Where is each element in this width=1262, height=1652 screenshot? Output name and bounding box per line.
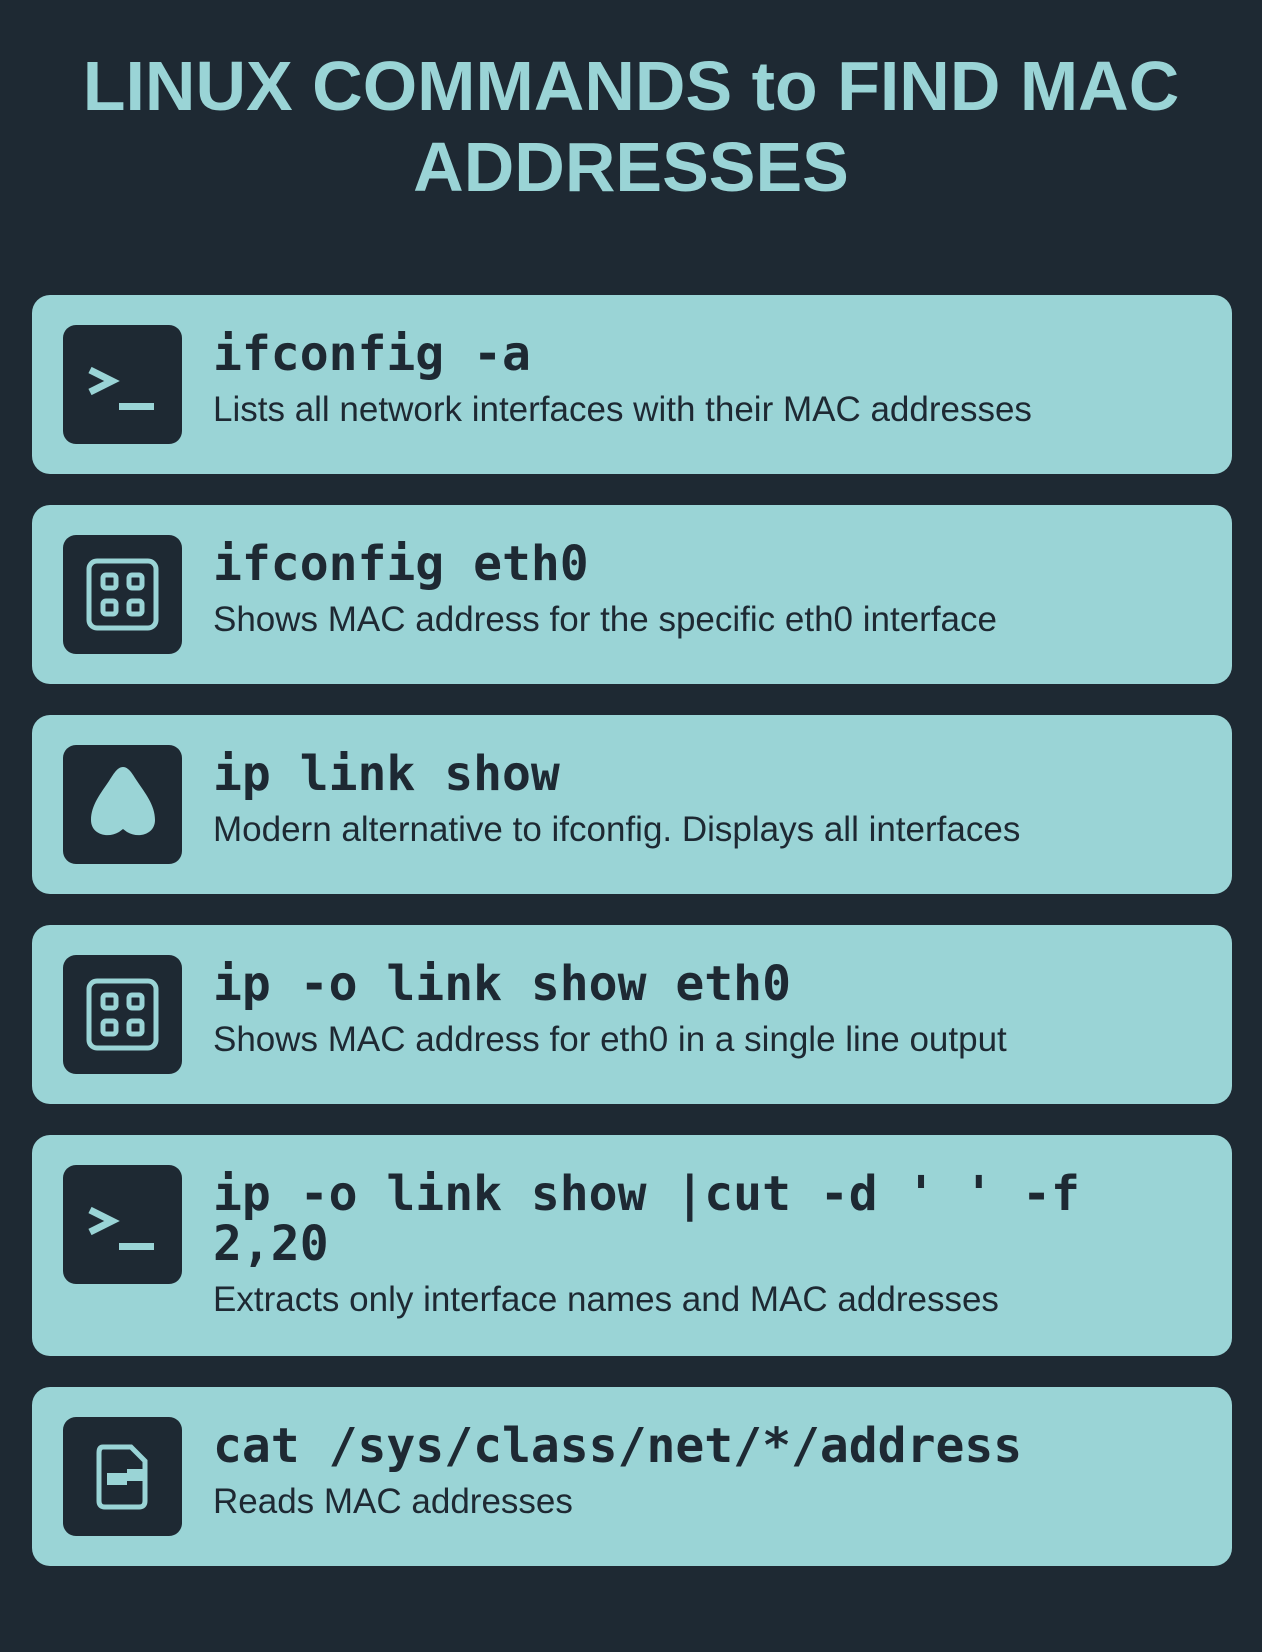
text: cut command: Extracts only interface names and MAC addresses: [213, 1280, 999, 1319]
text: cut command: [213, 1166, 1080, 1319]
icon: network card: [63, 955, 182, 1074]
text: ip -o link show eth0: ip -o link show eth0: [213, 956, 791, 1012]
text: ip link show: ip link show: [213, 746, 560, 802]
card: cat address: [32, 1387, 1232, 1566]
icon: terminal: [63, 325, 182, 444]
icon: network card: [63, 535, 182, 654]
title: LINUX COMMANDS to FIND MAC: [83, 47, 1179, 125]
title: ADDRESSES: [413, 128, 849, 206]
text: ifconfig eth0: ifconfig eth0: [213, 536, 589, 592]
card: ifconfig eth0: [32, 505, 1232, 684]
text: cut command: ip -o link show |cut -d ' ' -f: [213, 1166, 1080, 1222]
text: cat address: Reads MAC addresses: [213, 1482, 573, 1521]
icon: file: [63, 1417, 182, 1536]
text: ip -o link show eth0: Shows MAC address for eth0 in a single line output: [213, 1020, 1007, 1059]
text: cat address: cat /sys/class/net/*/address: [213, 1418, 1022, 1474]
text: cat address: [213, 1418, 1022, 1521]
text: ifconfig -a: ifconfig -a: [213, 326, 531, 382]
icon: link drop: [63, 745, 182, 864]
card: ip link show: [32, 715, 1232, 894]
text: ip link show: [213, 746, 1020, 849]
text: ip link show: Modern alternative to ifconfig. Displays all interfaces: [213, 810, 1020, 849]
text: ip -o link show eth0: [213, 956, 1007, 1059]
title: [83, 47, 1179, 206]
card: ip -o link show cut: [32, 1135, 1232, 1356]
text: cut command: 2,20: [213, 1216, 329, 1272]
card: ip -o link show eth0: [32, 925, 1232, 1104]
text: ifconfig -a: [213, 326, 1032, 429]
card: ifconfig -a: [32, 295, 1232, 474]
text: ifconfig eth0: Shows MAC address for the specific eth0 interface: [213, 600, 997, 639]
text: ifconfig -a: Lists all network interfaces with their MAC addresses: [213, 390, 1032, 429]
text: ifconfig eth0: [213, 536, 997, 639]
icon: terminal: [63, 1165, 182, 1284]
